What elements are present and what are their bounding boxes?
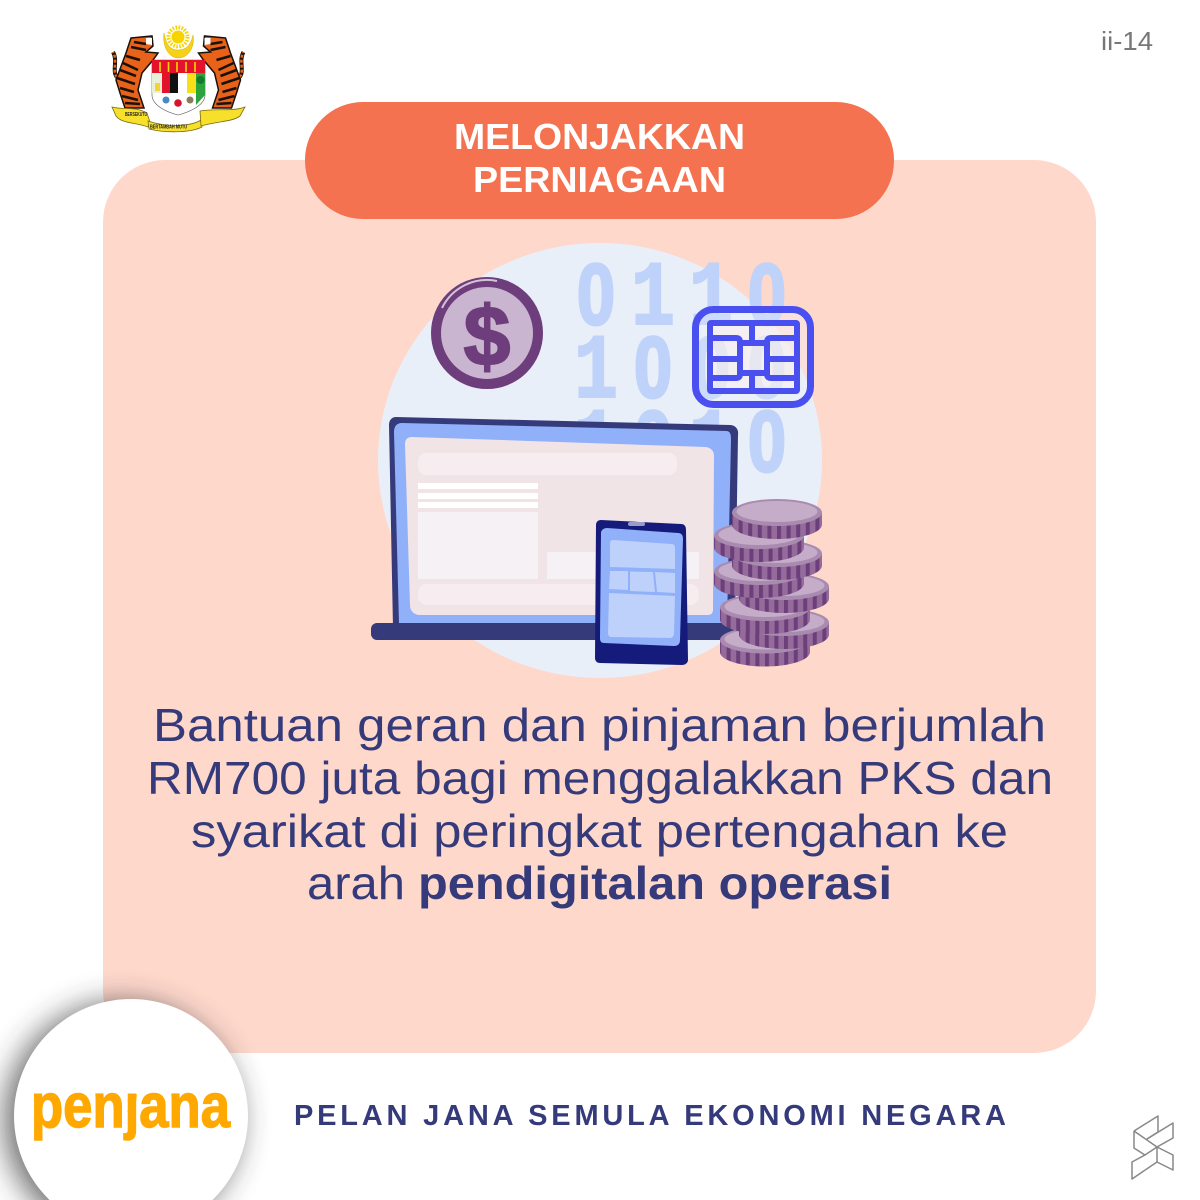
binary digits: 1 [574, 320, 618, 425]
body text: Bantuan geran dan pinjaman berjumlah [153, 699, 1046, 751]
binary digits: 1 [631, 247, 675, 352]
heading pill [305, 102, 894, 219]
heading pill: MELONJAKKAN [454, 116, 745, 157]
binary digits: 0 [634, 320, 672, 416]
laptop body [389, 417, 738, 628]
binary digits: 0 [692, 320, 730, 416]
illustration: digital business [371, 243, 829, 678]
smartphone [595, 520, 688, 665]
laptop screen [405, 437, 714, 615]
laptop [371, 417, 739, 640]
penjana logo badge: penjana [31, 1072, 230, 1141]
left tiger [113, 36, 158, 108]
panel: main peach card [103, 160, 1096, 1053]
binary digits: 1 [574, 394, 618, 499]
right tiger [198, 36, 244, 108]
binary digits: 0 [577, 247, 615, 343]
body text: RM700 juta bagi menggalakkan PKS dan [147, 752, 1053, 804]
binary digits: 0 [748, 247, 786, 343]
footer tagline: PELAN JANA SEMULA EKONOMI NEGARA [294, 1100, 1006, 1132]
binary digits: 1 [689, 247, 733, 352]
background circle [378, 243, 822, 678]
icon: publisher mark [1132, 1116, 1173, 1179]
body text [147, 699, 1053, 909]
body text: pendigitalan operasi [418, 857, 892, 909]
page number: ii-14 [1101, 26, 1153, 56]
ribbon motto: BERSEKUTU [125, 112, 147, 118]
coin stack [714, 499, 829, 666]
laptop base [371, 623, 739, 640]
icon: dollar coin: $ [464, 289, 510, 383]
ribbon motto: BERTAMBAH MUTU [150, 124, 187, 130]
heading pill: PERNIAGAAN [473, 159, 726, 200]
icon: SIM chip [696, 310, 810, 404]
icon: dollar coin [436, 280, 538, 384]
ribbon motto [112, 107, 245, 132]
shield [152, 60, 205, 115]
penjana logo badge [4, 999, 248, 1200]
binary digits [574, 247, 786, 499]
icon: Malaysian coat of arms [112, 28, 245, 132]
laptop screen frame [394, 423, 731, 624]
body text: syarikat di peringkat pertengahan ke [191, 805, 1008, 857]
binary digits: 1 [689, 394, 733, 499]
binary digits: 0 [748, 320, 786, 416]
body text: arah [307, 857, 405, 909]
binary digits: 0 [634, 394, 672, 490]
binary digits: 0 [748, 394, 786, 490]
sun and crescent [164, 28, 193, 58]
